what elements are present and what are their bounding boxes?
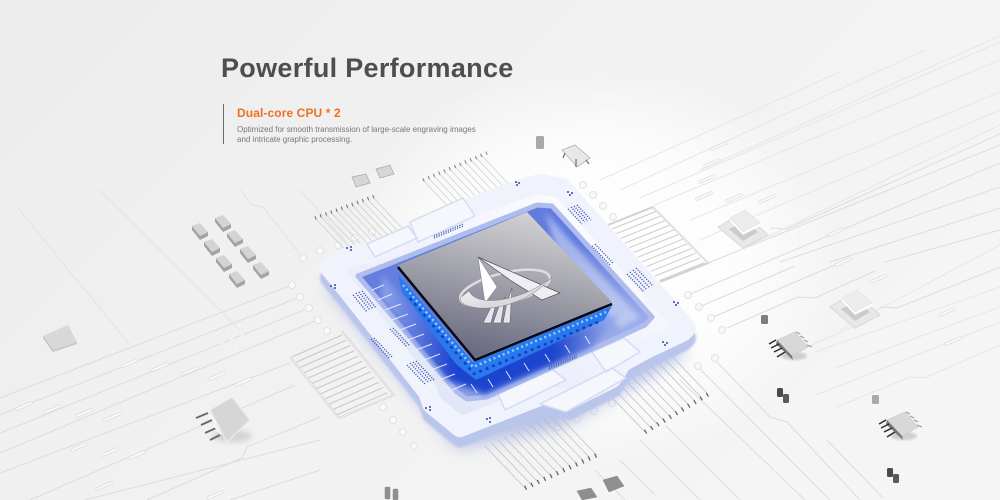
feature description bbox=[237, 125, 476, 144]
small capacitors right bbox=[536, 136, 899, 483]
blue circuit glow bbox=[382, 275, 622, 394]
small parts top left bbox=[352, 165, 394, 187]
blue ring bbox=[358, 205, 652, 399]
pin array top left bbox=[315, 195, 411, 258]
white solder dots bbox=[217, 245, 796, 471]
glass tabs bbox=[367, 198, 640, 412]
heat sink one bbox=[718, 210, 768, 248]
glass top plate bbox=[330, 184, 686, 427]
comb connector right bbox=[608, 207, 708, 282]
processor drop shadow bbox=[325, 285, 690, 448]
logo left blade bbox=[478, 257, 497, 303]
feature text block bbox=[223, 104, 484, 144]
bright circuitry strip bbox=[398, 275, 612, 380]
logo tail bbox=[483, 288, 512, 323]
logo ring back bbox=[457, 262, 553, 314]
die top bbox=[398, 212, 612, 358]
heat sink two bbox=[830, 290, 880, 328]
small parts bottom bbox=[385, 476, 624, 500]
feature description: and intricate graphic processing. bbox=[237, 134, 352, 144]
corner dots bbox=[330, 181, 679, 423]
circuit traces right bbox=[595, 36, 1000, 500]
die black edge bbox=[398, 267, 612, 360]
white trace pills bbox=[17, 143, 960, 498]
dotted contact pads bbox=[353, 205, 653, 384]
feature description: Optimized for smooth transmission of large-scale engraving images bbox=[237, 125, 476, 134]
glass base side bbox=[330, 194, 686, 437]
comb connector lower left bbox=[290, 331, 394, 418]
feature heading: Dual-core CPU * 2 bbox=[237, 106, 341, 120]
capacitor array left bbox=[192, 215, 269, 288]
chip component two bbox=[879, 412, 922, 440]
lower circuit pads bbox=[372, 285, 590, 393]
ring right side highlights bbox=[545, 212, 640, 328]
top socket component bbox=[562, 145, 590, 167]
circuit traces left bbox=[0, 190, 345, 500]
flat chip left bbox=[43, 325, 77, 352]
circuit noise bbox=[403, 285, 606, 374]
brand logo bbox=[457, 257, 560, 323]
pin array bottom bbox=[485, 413, 597, 488]
chip component one bbox=[769, 332, 812, 360]
title: Powerful Performance bbox=[221, 53, 514, 83]
connector component left bbox=[196, 397, 252, 442]
processor die bbox=[398, 212, 612, 360]
connection pads bbox=[288, 182, 726, 450]
glass processor package bbox=[330, 181, 686, 437]
logo ring front bbox=[460, 277, 552, 308]
logo right blade bbox=[478, 257, 560, 300]
pin array bottom right bbox=[605, 350, 710, 432]
pin array top bbox=[423, 153, 516, 217]
glow around processor bbox=[340, 65, 840, 465]
